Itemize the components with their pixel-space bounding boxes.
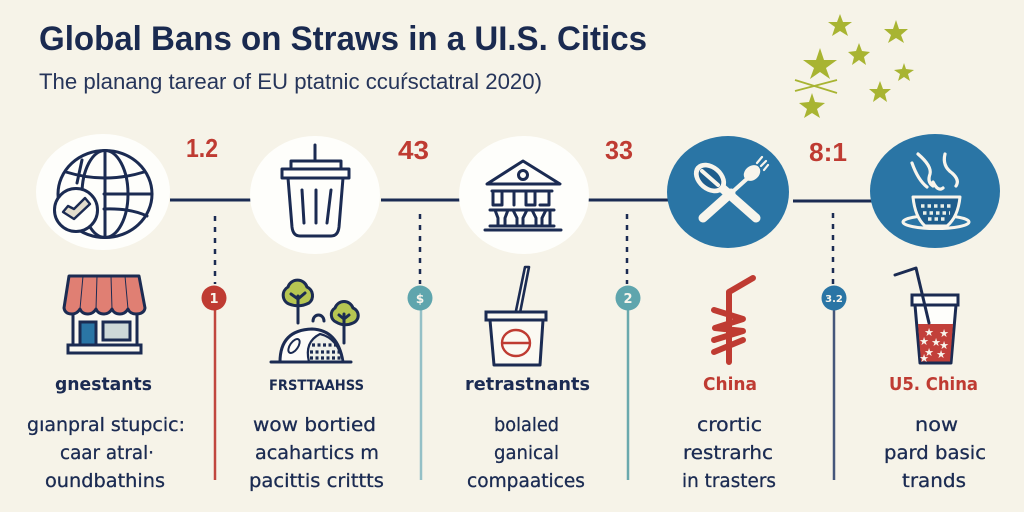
column 3 text: retrastnants: bolaled [494,414,559,436]
icon: drink with stars: ★ [939,327,949,340]
column 1 text: gnestants: caar atral· [60,442,154,464]
icon: storefront [64,276,145,353]
column 2 text: FRSTTAAHSS: acahartics m [255,442,379,464]
column 5 text: U5. China [884,374,986,492]
horizontal timeline connectors [170,200,872,201]
column 1 text: gnestants: oundbathins [45,470,165,492]
dotted connectors [215,213,833,284]
marker 2: teal badge and stem: $ [416,292,424,306]
icon: drink with stars: ★ [919,352,929,365]
marker 1: red badge and stem: 1 [209,292,219,307]
marker 2: teal badge and stem [408,286,432,480]
icon: green stars [795,14,914,118]
column 3 text: retrastnants: ganical [494,442,559,464]
column 5 text: U5. China: trands [902,470,966,492]
icon: red bent straw [714,278,753,362]
panel: trash bin circle icon [250,136,380,254]
column 3 text: retrastnants [465,374,590,492]
icon: drink with stars: ★ [924,326,934,339]
column 2 text: FRSTTAAHSS [249,378,384,492]
panel: fork and spoon circle icon [667,136,789,248]
panel: bank building circle icon [459,136,589,254]
column 1 text: gnestants [27,374,185,492]
icon: trees and dome [271,280,358,362]
metric: 8:1: 8:1 [809,137,847,167]
icon: drink with stars: ★ [936,348,946,361]
icon: cup with banned sign [486,267,546,365]
column 4 text: China: in trasters [682,470,776,492]
panel: globe circle icon [36,134,170,250]
column 4 text: China: restrarhc [683,442,773,464]
column 5 text: U5. China: now [915,414,958,436]
marker 3: teal badge and stem [616,286,640,480]
marker 4: blue badge and stem: 3.2 [825,294,843,305]
title: Global Bans on Straws in a UI.S. Citics [39,20,647,58]
metric: 43: 43 [398,135,429,165]
icon: drink with stars: ★ [939,339,949,352]
column 4 text: China: China [703,374,757,395]
icon: drink with stars [895,268,958,365]
panel: steaming cup circle icon [870,134,1000,248]
column 3 text: retrastnants: retrastnants [465,374,590,395]
column 4 text: China: crortic [697,414,762,436]
column 1 text: gnestants: gıanpral stupcic: [27,414,185,436]
metric: 33: 33 [605,135,633,165]
marker 3: teal badge and stem: 2 [623,292,633,307]
column 1 text: gnestants: gnestants [55,374,152,395]
icon: drink with stars: ★ [931,336,941,349]
column 2 text: FRSTTAAHSS: pacittis crittts [249,470,384,492]
column 4 text: China [682,374,776,492]
marker 4: blue badge and stem [822,286,846,480]
column 3 text: retrastnants: compaatices [467,470,585,492]
subtitle: The planang tarear of EU ptatnic ccuŕsctatral 2020) [39,69,542,94]
icon: drink with stars: ★ [924,346,934,359]
icon: drink with stars: ★ [919,335,929,348]
column 5 text: U5. China: U5. China [889,374,978,395]
marker 1: red badge and stem [202,286,226,480]
metric: 1.2: 1.2 [186,133,218,163]
column 5 text: U5. China: pard basic [884,442,986,464]
column 2 text: FRSTTAAHSS: FRSTTAAHSS [269,378,364,394]
column 2 text: FRSTTAAHSS: wow bortied [253,414,376,436]
